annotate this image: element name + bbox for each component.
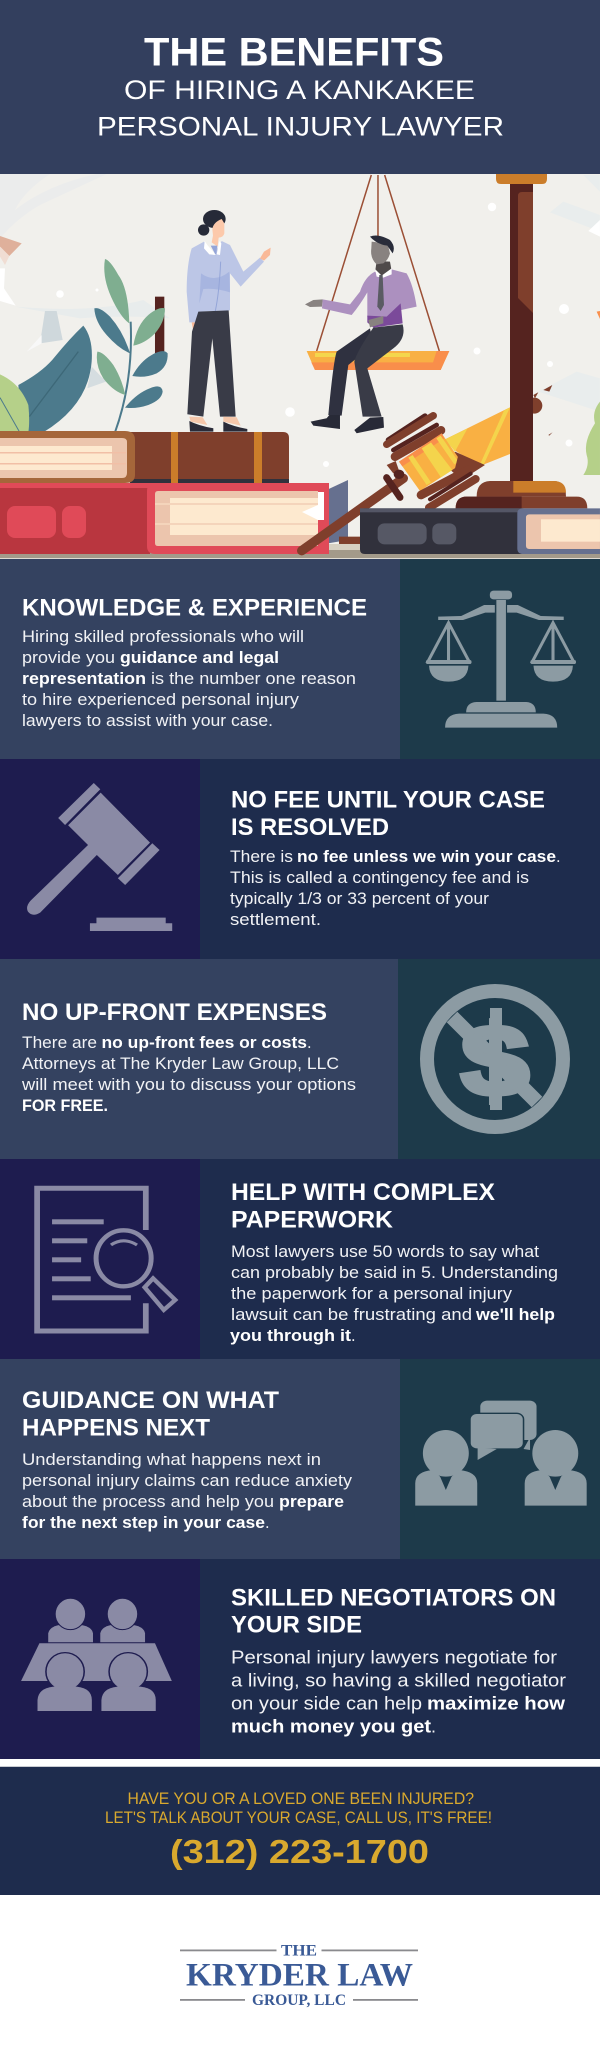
heading — [231, 1585, 556, 1639]
body text: Personal injury lawyers negotiate for — [231, 1648, 557, 1668]
icon: document with magnifier — [37, 1188, 175, 1331]
panel: guidance on what happens next — [0, 1359, 600, 1559]
heading: NO UP-FRONT EXPENSES — [22, 999, 327, 1026]
body text: prepare — [279, 1493, 344, 1511]
heading — [22, 1387, 279, 1442]
title header: PERSONAL INJURY LAWYER — [97, 112, 504, 142]
body text: can probably be said in 5. Understanding — [231, 1264, 558, 1282]
gavel handle and yellow scale beam — [302, 407, 510, 551]
panel: no up-front expenses — [0, 959, 600, 1159]
logo: The Kryder Law Group, LLC: GROUP, LLC — [252, 1992, 346, 2009]
body text: guidance and legal — [120, 649, 279, 667]
body text: typically 1/3 or 33 percent of your — [230, 890, 490, 908]
body text: Understanding what happens next in — [22, 1451, 321, 1469]
body text: to hire experienced personal injury — [22, 691, 300, 709]
heading: KNOWLEDGE & EXPERIENCE — [22, 595, 367, 622]
body text: about the process and help you — [22, 1493, 274, 1511]
body text: provide you — [22, 649, 115, 667]
body text: no fee unless we win your case — [297, 848, 556, 866]
body text: a living, so having a skilled negotiator — [231, 1671, 566, 1691]
body text: . — [351, 1327, 356, 1345]
body text: settlement. — [230, 911, 321, 929]
heading: HAPPENS NEXT — [22, 1415, 210, 1442]
background shapes left — [0, 174, 170, 432]
body text: FOR FREE. — [22, 1097, 108, 1115]
title header — [0, 0, 600, 174]
title header: OF HIRING A KANKAKEE — [124, 75, 475, 105]
heading: HELP WITH COMPLEX — [231, 1179, 495, 1206]
body text: will meet with you to discuss your options — [21, 1076, 356, 1094]
book stack: brown book — [0, 431, 289, 483]
body text: lawsuit can be frustrating and — [231, 1306, 472, 1324]
call to action banner — [0, 1766, 600, 1895]
background shapes right — [526, 175, 600, 475]
logo: The Kryder Law Group, LLC: KRYDER LAW — [186, 1958, 413, 1994]
balance column — [496, 174, 547, 494]
logo: The Kryder Law Group, LLC — [180, 1943, 418, 2009]
title header: THE BENEFITS — [144, 30, 444, 74]
panel: no fee until your case is resolved — [0, 759, 600, 959]
heading: IS RESOLVED — [231, 814, 389, 841]
panel: knowledge and experience — [0, 559, 600, 759]
body text — [231, 1648, 566, 1737]
woman — [187, 210, 271, 432]
icon: scales of justice — [426, 591, 576, 728]
man — [305, 236, 417, 433]
body text: we'll help — [475, 1306, 555, 1324]
body text: . — [556, 848, 561, 866]
body text: is the number one reason — [151, 670, 356, 688]
icon: no dollar sign: $ — [461, 1005, 529, 1117]
panel: help with complex paperwork — [0, 1159, 600, 1359]
heading — [231, 1179, 495, 1234]
body text: There are — [22, 1034, 97, 1052]
icon: no dollar sign — [427, 991, 563, 1127]
heading — [231, 787, 545, 841]
balance base — [339, 481, 587, 544]
body text: . — [265, 1514, 270, 1532]
icon: two people talking — [415, 1401, 587, 1506]
body text — [230, 848, 561, 929]
icon: people around a negotiating table — [21, 1598, 172, 1711]
body text: personal injury claims can reduce anxiety — [22, 1472, 353, 1490]
body text: no up-front fees or costs — [102, 1034, 307, 1052]
body text: maximize how — [427, 1694, 566, 1714]
heading: SKILLED NEGOTIATORS ON — [231, 1585, 556, 1612]
body text: for the next step in your case — [22, 1514, 265, 1532]
body text: . — [307, 1034, 312, 1052]
body text — [21, 1034, 356, 1115]
body text: representation — [22, 670, 146, 688]
body text: Attorneys at The Kryder Law Group, LLC — [22, 1055, 339, 1073]
body text: lawyers to assist with your case. — [22, 712, 273, 730]
book stack: red book with blue book behind — [0, 480, 348, 554]
call to action banner: (312) 223-1700 — [170, 1833, 429, 1870]
body text — [22, 1451, 353, 1532]
white snow dots — [56, 203, 572, 467]
call to action banner: LET'S TALK ABOUT YOUR CASE, CALL US, IT'S FREE! — [105, 1809, 492, 1827]
heading: YOUR SIDE — [231, 1612, 362, 1639]
body text: There is — [230, 848, 293, 866]
body text — [230, 1243, 558, 1345]
body text: the paperwork for a personal injury — [231, 1285, 513, 1303]
body text: Hiring skilled professionals who will — [22, 628, 304, 646]
heading: PAPERWORK — [231, 1207, 394, 1234]
body text: much money you get — [231, 1717, 431, 1737]
man and woman, swing — [187, 175, 449, 433]
call to action banner: HAVE YOU OR A LOVED ONE BEEN INJURED? — [128, 1790, 474, 1808]
icon: gavel — [27, 783, 172, 931]
body text: you through it — [230, 1327, 352, 1345]
dark book — [360, 508, 600, 554]
body text: Most lawyers use 50 words to say what — [231, 1243, 539, 1261]
panel: skilled negotiators on your side — [0, 1559, 600, 1759]
logo: The Kryder Law Group, LLC: THE — [281, 1943, 317, 1960]
floor — [0, 548, 600, 559]
heading: NO FEE UNTIL YOUR CASE — [231, 787, 545, 814]
illustration: lawyer and client on scales of justice — [0, 174, 600, 559]
heading: GUIDANCE ON WHAT — [22, 1387, 279, 1414]
body text: . — [431, 1717, 436, 1737]
body text — [22, 628, 356, 730]
body text: on your side can help — [231, 1694, 422, 1714]
gavel head — [387, 416, 476, 508]
body text: This is called a contingency fee and is — [230, 869, 529, 887]
